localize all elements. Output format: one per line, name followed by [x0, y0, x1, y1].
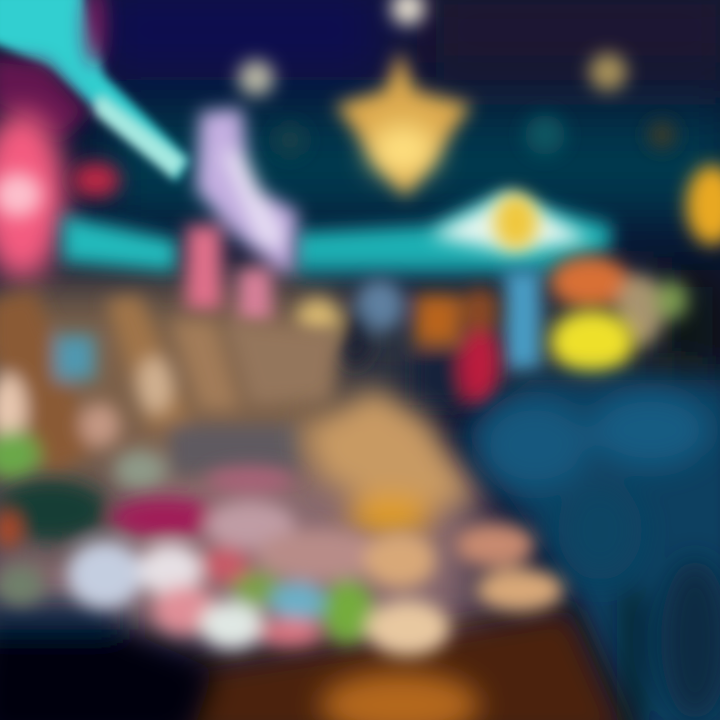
- dark foreground, bottom left: [0, 602, 215, 720]
- figures in background: [296, 279, 500, 407]
- pink neon sign: [0, 110, 66, 280]
- blue pillar: [505, 270, 541, 370]
- brown wooden table, bottom: [170, 610, 628, 720]
- ceiling lights: [238, 0, 676, 156]
- maroon canopy: [0, 0, 105, 140]
- golden chandelier: [335, 50, 472, 198]
- cyan awning, top left: [0, 0, 190, 182]
- pink sign highlight: [0, 173, 42, 217]
- tan wooden chairs: [0, 290, 340, 490]
- yellow wall light, right edge: [686, 165, 720, 245]
- tan centre mound: [300, 385, 475, 535]
- orange and yellow lantern: [550, 256, 688, 374]
- ceiling and wall colour washes: [0, 0, 720, 400]
- left teal band: [62, 215, 178, 272]
- blue velvet sofa: [462, 380, 720, 720]
- right teal band with white and yellow awning: [295, 192, 612, 278]
- mottled underlayer for chairs and table: [0, 290, 480, 640]
- colourful items on table: [0, 466, 564, 656]
- red light: [72, 162, 120, 198]
- pink and lavender flags: [186, 108, 298, 323]
